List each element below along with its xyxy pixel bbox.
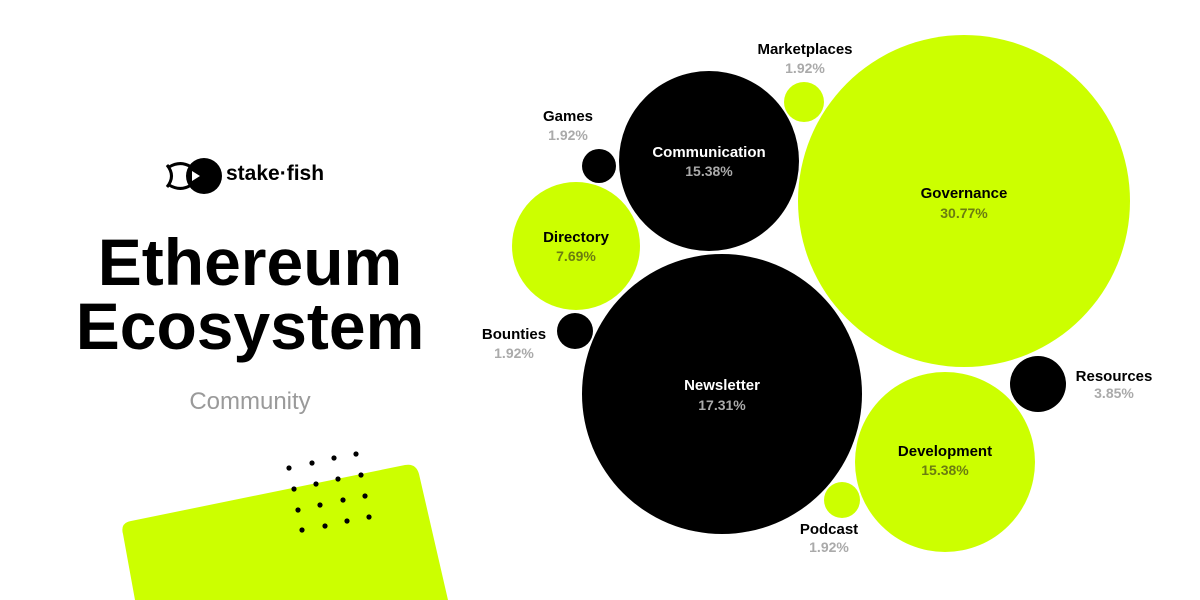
bubble chart: 1.92% (809, 539, 849, 555)
bubble chart: Bounties (482, 326, 546, 343)
bubble chart: 1.92% (785, 60, 825, 76)
title: Ethereum (98, 225, 402, 299)
bubble chart: Directory (543, 229, 610, 246)
subtitle: Community (189, 388, 311, 415)
title (76, 225, 424, 363)
bubble chart: Games (543, 108, 593, 125)
bubble chart: 17.31% (698, 397, 746, 413)
bubble chart: Communication (652, 144, 766, 161)
bubble chart: Newsletter (684, 377, 760, 394)
logo: stake·fish (226, 162, 324, 185)
bubble chart: Development (898, 443, 992, 460)
bubble chart: Governance (921, 185, 1007, 202)
bubble chart: 1.92% (494, 345, 534, 361)
bubble chart: Resources (1076, 368, 1152, 385)
bubble chart: 30.77% (940, 205, 988, 221)
bubble chart: Marketplaces (757, 41, 853, 58)
logo (166, 158, 324, 194)
bubble chart: Podcast (800, 521, 858, 538)
title: Ecosystem (76, 289, 424, 363)
bubble chart: 15.38% (921, 462, 969, 478)
bubble chart: 15.38% (685, 163, 733, 179)
bubble chart: 1.92% (548, 127, 588, 143)
bubble chart: 7.69% (556, 248, 596, 264)
bubble chart: 3.85% (1094, 385, 1134, 401)
